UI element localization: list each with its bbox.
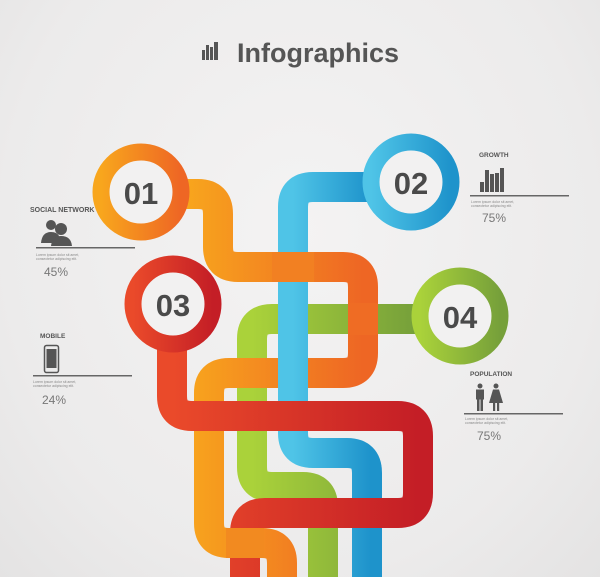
circle 04: 04 <box>443 300 478 335</box>
icon: title bars <box>202 42 218 60</box>
panel: growth: 75% <box>482 211 506 225</box>
pipe: orange <box>185 194 363 577</box>
panel: population <box>464 371 563 443</box>
circle 04 <box>420 276 500 356</box>
panel: social network: consectetur adipiscing elit. <box>36 257 77 261</box>
panel: social network: Lorem ipsum dolor sit amet, <box>36 253 79 257</box>
circle 02 <box>371 142 451 222</box>
panel: population: 75% <box>477 429 501 443</box>
circle 03 <box>133 264 213 344</box>
panel: growth: consectetur adipiscing elit. <box>471 204 512 208</box>
panel: growth: Lorem ipsum dolor sit amet, <box>471 200 514 204</box>
panel: growth: GROWTH <box>479 152 509 159</box>
panel: mobile: 24% <box>42 393 66 407</box>
icon: bar chart <box>480 168 504 192</box>
circle 02: 02 <box>394 166 428 201</box>
panel: population: Lorem ipsum dolor sit amet, <box>465 417 508 421</box>
panel: growth <box>470 152 569 225</box>
panel: mobile: Lorem ipsum dolor sit amet, <box>33 380 76 384</box>
panel: social network: 45% <box>44 265 68 279</box>
icon: phone <box>44 346 58 372</box>
circle 03: 03 <box>156 288 190 323</box>
title: Infographics <box>237 38 399 68</box>
icon: man and woman <box>476 384 503 411</box>
pipe: red <box>172 345 418 577</box>
panel: mobile: consectetur adipiscing elit. <box>33 384 74 388</box>
panel: population: consectetur adipiscing elit. <box>465 421 506 425</box>
pipe: blue <box>293 187 370 577</box>
icon: people <box>41 220 72 246</box>
pipe: green <box>252 319 415 577</box>
pipe crossings: orange over <box>226 252 378 558</box>
circle 01: 01 <box>124 176 158 211</box>
panel: population: POPULATION <box>470 371 512 378</box>
panel: social network: SOCIAL NETWORK <box>30 207 94 214</box>
panel: social network <box>30 207 135 279</box>
panel: mobile: MOBILE <box>40 333 66 340</box>
panel: mobile <box>33 333 132 407</box>
circle 01 <box>101 152 181 232</box>
